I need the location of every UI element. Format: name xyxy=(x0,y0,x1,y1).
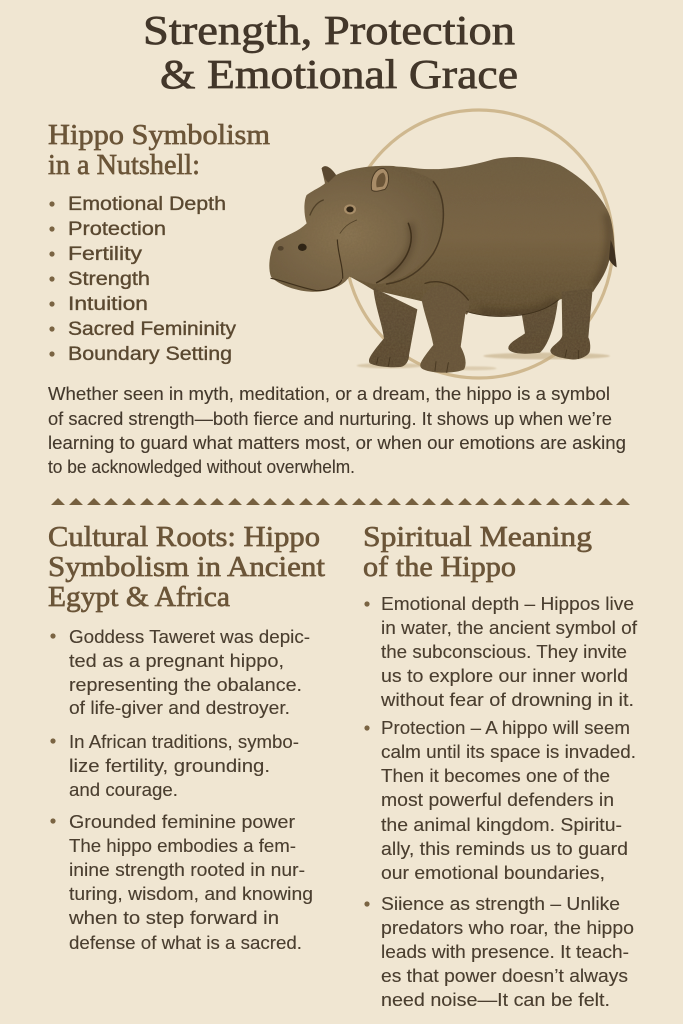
text block: african traditions xyxy=(50,732,299,800)
illustration: hippo in circle xyxy=(269,110,617,378)
text block: grounded feminine power xyxy=(50,812,313,953)
icon: eye and nostril xyxy=(278,204,356,251)
text block: african traditions: lize fertility, grounding. xyxy=(69,756,270,776)
bullet list: symbolism keywords: Fertility xyxy=(68,244,143,265)
title: & Emotional Grace xyxy=(160,51,518,97)
panel: cultural roots xyxy=(48,522,325,953)
title: Strength, Protection xyxy=(143,7,515,53)
text block: african traditions: and courage. xyxy=(69,780,178,800)
text block: silence as strength xyxy=(364,894,634,1010)
heading: spiritual meaning: Spiritual Meaning xyxy=(363,522,592,553)
panel: spiritual meaning xyxy=(363,522,638,1010)
bullet list: symbolism keywords: Sacred Femininity xyxy=(68,319,237,340)
bullet list: symbolism keywords: Intuition xyxy=(68,294,148,315)
intro paragraph: of sacred strength—both fierce and nurturing. It shows up when we’re xyxy=(48,409,612,429)
intro paragraph: to be acknowledged without overwhelm. xyxy=(48,457,355,477)
text block: goddess taweret xyxy=(50,627,310,718)
intro paragraph: learning to guard what matters most, or when our emotions are asking xyxy=(48,433,626,453)
intro paragraph xyxy=(48,384,626,477)
text block: protection: most powerful defenders in xyxy=(381,790,614,810)
text block: goddess taweret: Goddess Taweret was depic- xyxy=(69,627,310,647)
bullet list: symbolism keywords: Protection xyxy=(68,219,166,240)
text block: grounded feminine power: The hippo embodies a fem- xyxy=(69,836,296,856)
text block: emotional depth: the subconscious. They invite xyxy=(381,642,627,662)
text block: silence as strength: leads with presence. It teach- xyxy=(381,942,629,962)
text block: grounded feminine power: inine strength rooted in nur- xyxy=(69,860,305,880)
text block: goddess taweret: ted as a pregnant hippo, xyxy=(69,651,284,671)
text block: silence as strength: es that power doesn’t always xyxy=(381,966,628,986)
heading: spiritual meaning xyxy=(363,522,592,583)
text block: protection: the animal kingdom. Spiritu- xyxy=(381,815,622,835)
text block: emotional depth: us to explore our inner world xyxy=(381,666,628,686)
text block: emotional depth: in water, the ancient symbol of xyxy=(381,618,638,638)
text block: silence as strength: predators who roar, the hippo xyxy=(381,918,634,938)
bullet list: symbolism keywords: Emotional Depth xyxy=(68,194,226,215)
heading: cultural roots: Egypt & Africa xyxy=(48,582,230,613)
bullet list: symbolism keywords xyxy=(49,194,237,365)
text block: protection: ally, this reminds us to guard xyxy=(381,839,628,859)
text block: silence as strength: need noise—It can be felt. xyxy=(381,990,610,1010)
text block: goddess taweret: representing the obalance. xyxy=(69,675,302,695)
icon: far ear xyxy=(322,166,336,183)
text block: silence as strength: Siience as strength – Unlike xyxy=(381,894,620,914)
bullet list: symbolism keywords: Boundary Setting xyxy=(68,344,232,365)
heading: spiritual meaning: of the Hippo xyxy=(363,552,516,583)
text block: protection: Then it becomes one of the xyxy=(381,766,610,786)
icon: tan circle xyxy=(345,110,613,378)
text block: goddess taweret: of life-giver and destroyer. xyxy=(69,698,290,718)
icon: tail xyxy=(609,240,617,267)
divider: triangle band xyxy=(51,498,630,505)
intro paragraph: Whether seen in myth, meditation, or a dream, the hippo is a symbol xyxy=(48,384,610,404)
text block: protection xyxy=(364,718,636,883)
heading: cultural roots: Symbolism in Ancient xyxy=(48,552,325,583)
heading: hippo symbolism in a nutshell: in a Nutshell: xyxy=(48,150,200,181)
bullet list: symbolism keywords: Strength xyxy=(68,269,150,290)
text block: emotional depth: without fear of drowning in it. xyxy=(380,690,634,710)
text block: protection: calm until its space is invaded. xyxy=(381,742,636,762)
text block: emotional depth xyxy=(364,594,638,710)
soft shading xyxy=(387,213,609,315)
text block: african traditions: In African traditions, symbo- xyxy=(69,732,299,752)
icon: near ear xyxy=(371,168,389,191)
heading: cultural roots xyxy=(48,522,325,613)
text block: grounded feminine power: defense of what is a sacred. xyxy=(69,933,302,953)
heading: hippo symbolism in a nutshell xyxy=(48,120,270,181)
text block: emotional depth: Emotional depth – Hippos live xyxy=(381,594,634,614)
hippo figure xyxy=(269,157,617,373)
heading: cultural roots: Cultural Roots: Hippo xyxy=(48,522,320,553)
text block: grounded feminine power: turing, wisdom, and knowing xyxy=(69,884,313,904)
text block: protection: Protection – A hippo will seem xyxy=(381,718,630,738)
text block: grounded feminine power: when to step forward in xyxy=(68,908,279,928)
title xyxy=(143,7,518,97)
heading: hippo symbolism in a nutshell: Hippo Symbolism xyxy=(48,120,270,151)
text block: grounded feminine power: Grounded feminine power xyxy=(69,812,295,832)
text block: protection: our emotional boundaries, xyxy=(381,863,605,883)
